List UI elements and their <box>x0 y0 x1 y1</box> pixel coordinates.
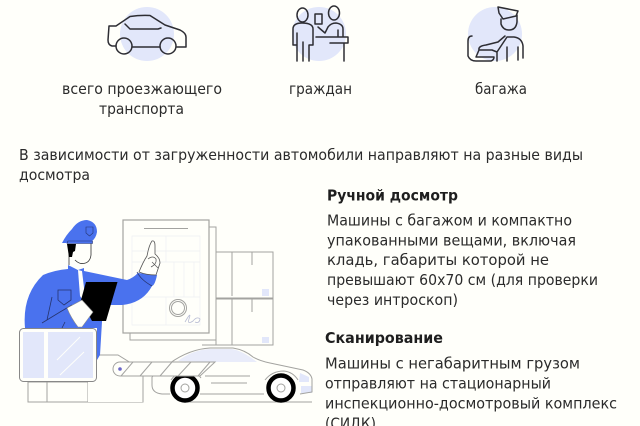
necktie <box>78 270 85 299</box>
label: all transport: всего проезжающего <box>62 80 222 98</box>
label: all transport <box>62 80 222 118</box>
illustration: barrier gate housing <box>28 355 143 402</box>
text: manual inspection: Машины с багажом и компактно <box>327 212 572 230</box>
illustration: control booth window <box>20 328 96 382</box>
illustration: barrier arm <box>113 362 215 376</box>
text: manual inspection: через интроскоп) <box>327 291 458 309</box>
officer pointing hand <box>139 241 160 275</box>
officer face and neck <box>69 243 91 270</box>
officer uniform <box>25 265 157 360</box>
text: scanning: Машины с негабаритным грузом <box>325 354 580 372</box>
text: manual inspection <box>327 212 598 309</box>
text: scanning: инспекционно-досмотровый комплекс <box>325 394 617 412</box>
text: scanning <box>325 354 617 426</box>
icon: citizen at passport desk <box>292 6 348 61</box>
intro paragraph <box>19 146 583 184</box>
illustration: sedan car <box>152 348 312 402</box>
illustration: officer <box>25 220 160 360</box>
intro paragraph: досмотра <box>19 166 90 184</box>
heading: scanning: Сканирование <box>325 329 443 347</box>
officer hand on tablet <box>67 300 93 327</box>
intro paragraph: В зависимости от загруженности автомобили направляют на разные виды <box>19 146 583 164</box>
label: citizens: граждан <box>289 80 352 98</box>
cap band and badge <box>67 227 93 244</box>
icon: car <box>108 7 186 61</box>
heading: manual inspection: Ручной досмотр <box>327 186 458 204</box>
text: scanning: отправляют на стационарный <box>325 374 551 392</box>
label: luggage: багажа <box>475 80 527 98</box>
illustration: document sheets <box>123 220 216 340</box>
text: manual inspection: кладь, габариты которой не <box>327 251 549 269</box>
tablet <box>81 282 118 321</box>
officer hair <box>67 244 76 257</box>
label: all transport: транспорта <box>99 100 184 118</box>
text: manual inspection: упакованными вещами, включая <box>327 232 576 250</box>
text: manual inspection: превышают 60х70 см (для проверки <box>327 271 598 289</box>
icon: customs officer <box>468 7 523 61</box>
uniform details <box>42 272 152 328</box>
officer cap <box>62 220 97 243</box>
illustration: cardboard boxes <box>202 252 273 345</box>
